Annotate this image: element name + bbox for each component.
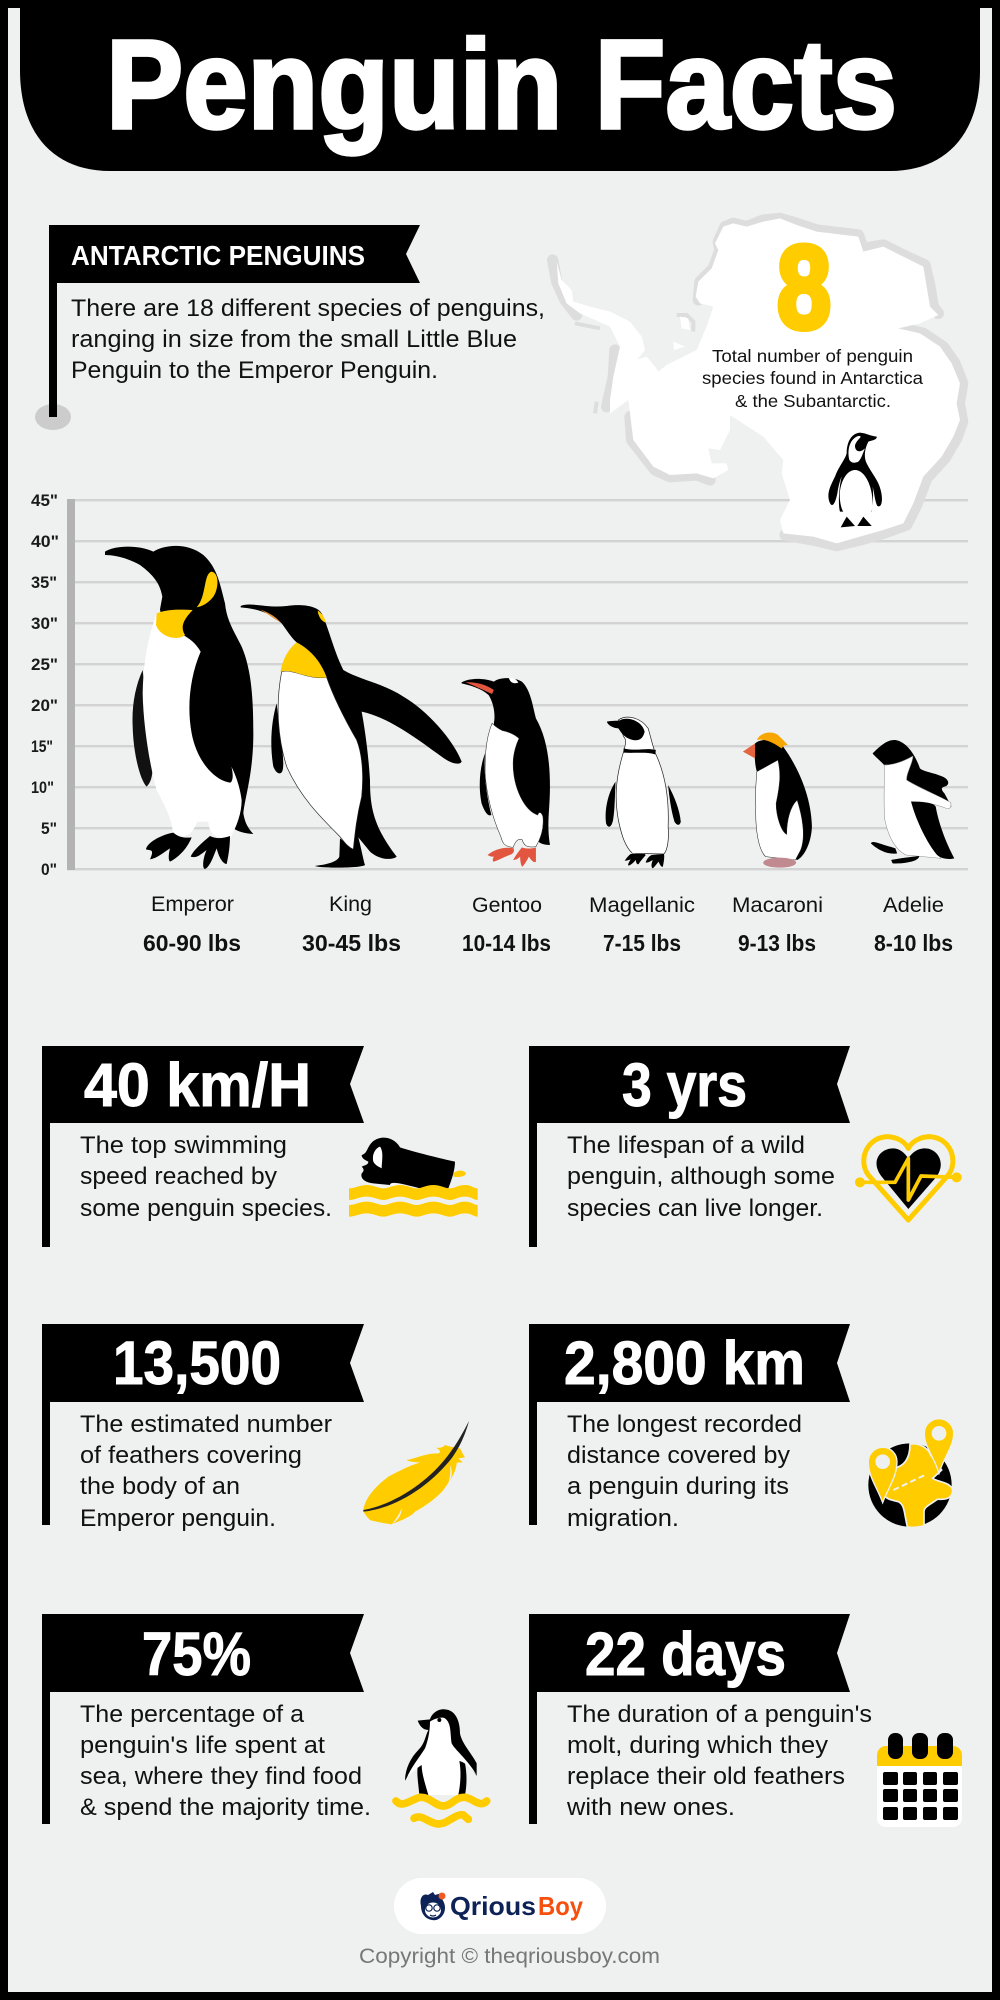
axis labels: 15"	[31, 737, 53, 756]
species names and weights: Macaroni	[732, 894, 823, 917]
panel: lifespan: 3 yrs	[622, 1051, 747, 1119]
penguin: emperor	[105, 546, 253, 869]
panel: life at sea	[42, 1614, 487, 1824]
axis labels: 40"	[31, 532, 59, 551]
panel: lifespan: The lifespan of a wild	[567, 1132, 805, 1159]
header banner with title	[20, 0, 980, 171]
axis labels: 30"	[31, 614, 58, 633]
panel: molt duration: with new ones.	[566, 1794, 735, 1821]
panel: life at sea: The percentage of a	[80, 1701, 305, 1728]
species names and weights: 60-90 lbs	[143, 930, 241, 956]
panel: life at sea: 75%	[142, 1620, 251, 1688]
panel: swimming speed: The top swimming	[80, 1132, 287, 1159]
panel: antarctic penguins intro	[35, 225, 545, 430]
penguin: magellanic	[606, 717, 681, 868]
panel: feathers: 13,500	[113, 1329, 281, 1397]
icon: calendar	[877, 1733, 962, 1827]
copyright: Copyright © theqriousboy.com	[359, 1945, 660, 1968]
panel: feathers: of feathers covering	[80, 1442, 302, 1469]
panel: lifespan: species can live longer.	[567, 1195, 823, 1222]
icon: penguin on waves	[396, 1709, 487, 1824]
panel: lifespan	[529, 1046, 962, 1247]
intro text: ranging in size from the small Little Blue	[71, 326, 517, 353]
species names and weights: 8-10 lbs	[874, 930, 953, 956]
logo: QriousBoy	[394, 1878, 606, 1934]
panel: life at sea: & spend the majority time.	[80, 1794, 371, 1821]
panel: swimming speed: 40 km/H	[84, 1051, 311, 1119]
intro text	[71, 295, 545, 384]
species names and weights: 30-45 lbs	[302, 930, 401, 956]
stat: total species	[702, 222, 923, 411]
panel: migration distance: 2,800 km	[564, 1329, 805, 1397]
panel: molt duration: molt, during which they	[567, 1732, 828, 1759]
panel: migration distance: migration.	[567, 1505, 679, 1532]
title: Penguin Facts	[106, 14, 897, 155]
axis labels: 35"	[31, 573, 57, 592]
panel: swimming speed	[42, 1046, 478, 1247]
penguin: adelie	[871, 740, 954, 863]
species names and weights: Emperor	[151, 893, 234, 916]
panel: molt duration: replace their old feathers	[567, 1763, 845, 1790]
stat caption	[702, 346, 923, 411]
axis labels: 10"	[31, 778, 54, 797]
species names and weights: King	[329, 893, 372, 916]
panel: feathers: the body of an	[80, 1473, 240, 1500]
panel: migration distance: a penguin during its	[567, 1473, 789, 1500]
panel: swimming speed: speed reached by	[80, 1163, 277, 1190]
stat: total species: 8	[777, 222, 831, 354]
panel: feathers	[42, 1324, 469, 1532]
species names and weights: 10-14 lbs	[462, 930, 551, 956]
height chart	[31, 491, 968, 956]
panel: molt duration: 22 days	[585, 1620, 786, 1688]
icon: feather	[363, 1421, 469, 1524]
panel: migration distance: The longest recorded	[567, 1411, 802, 1438]
panel: swimming speed: some penguin species.	[80, 1195, 332, 1222]
intro text: Penguin to the Emperor Penguin.	[71, 357, 438, 384]
stat caption: Total number of penguin	[712, 346, 913, 366]
species names and weights	[143, 893, 953, 956]
intro text: There are 18 different species of penguins,	[71, 295, 545, 322]
axis labels: 5"	[41, 819, 57, 838]
panel: life at sea: penguin's life spent at	[80, 1732, 325, 1759]
species names and weights: Adelie	[883, 894, 944, 917]
species names and weights: Magellanic	[589, 894, 695, 917]
panel: molt duration	[529, 1614, 962, 1827]
intro heading: ANTARCTIC PENGUINS	[71, 240, 365, 271]
penguin: gentoo	[462, 678, 550, 867]
axis labels: 45"	[31, 491, 58, 510]
icon: swimming penguin	[349, 1138, 478, 1217]
logo: QriousBoy: Qrious	[450, 1891, 536, 1921]
panel: migration distance: distance covered by	[567, 1442, 790, 1469]
stat caption: species found in Antarctica	[702, 368, 923, 388]
panel: migration distance	[529, 1324, 954, 1532]
panel: life at sea: sea, where they find food	[80, 1763, 362, 1790]
icon: boy head	[420, 1892, 446, 1920]
icon: map globe with pins	[868, 1419, 954, 1527]
panel: lifespan: penguin, although some	[567, 1163, 835, 1190]
small penguin in map	[828, 433, 882, 527]
axis labels: 0"	[41, 860, 57, 879]
penguin: macaroni	[743, 733, 812, 868]
antarctica map	[553, 218, 963, 546]
axis labels	[31, 491, 59, 879]
logo: QriousBoy: Boy	[538, 1891, 583, 1921]
panel: feathers: The estimated number	[80, 1411, 332, 1438]
panel: molt duration: The duration of a penguin's	[567, 1701, 872, 1728]
stat caption: & the Subantarctic.	[735, 391, 891, 411]
species names and weights: 7-15 lbs	[603, 930, 681, 956]
penguin: king	[241, 604, 462, 868]
species names and weights: Gentoo	[472, 894, 542, 917]
panel: feathers: Emperor penguin.	[80, 1505, 276, 1532]
icon: heartbeat	[855, 1137, 962, 1220]
axis labels: 20"	[31, 696, 58, 715]
species names and weights: 9-13 lbs	[738, 930, 816, 956]
axis labels: 25"	[31, 655, 58, 674]
